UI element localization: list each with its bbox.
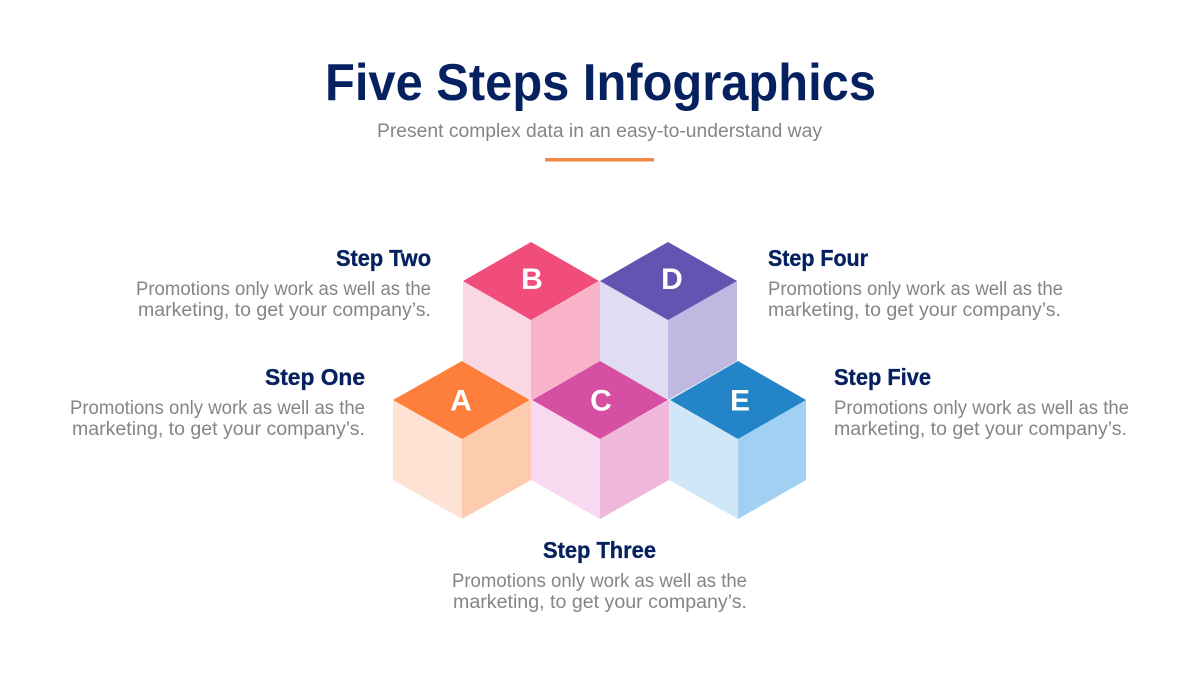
text block: step three: Promotions only work as well as the bbox=[452, 571, 747, 592]
text block: step two: Promotions only work as well as the bbox=[136, 279, 431, 300]
cube A: A bbox=[450, 384, 472, 418]
text block: step four bbox=[768, 245, 1063, 321]
cube D: D bbox=[661, 263, 683, 296]
cube C: C bbox=[590, 384, 612, 418]
text block: step four: marketing, to get your company’s. bbox=[768, 300, 1061, 321]
text block: step one bbox=[70, 364, 365, 440]
text block: step one: marketing, to get your company’s. bbox=[72, 419, 365, 440]
text block: step five bbox=[834, 364, 1129, 440]
text block: step five: marketing, to get your company’s. bbox=[834, 419, 1127, 440]
text block: step one: Promotions only work as well as the bbox=[70, 398, 365, 419]
text block: step three: marketing, to get your company’s. bbox=[453, 592, 747, 613]
text block: step two: Step Two bbox=[336, 245, 431, 271]
text block: step one: Step One bbox=[265, 364, 365, 390]
cube A bbox=[393, 361, 531, 519]
orange accent rule bbox=[545, 158, 654, 162]
text block: step four: Step Four bbox=[768, 245, 868, 271]
text block: step five: Step Five bbox=[834, 364, 931, 390]
text block: step three bbox=[452, 537, 747, 613]
cube B bbox=[463, 242, 600, 400]
cube C bbox=[531, 361, 669, 519]
title: Five Steps Infographics bbox=[325, 54, 876, 112]
cube D bbox=[600, 242, 737, 400]
text block: step two bbox=[136, 245, 431, 321]
cube B: B bbox=[521, 263, 543, 296]
text block: step four: Promotions only work as well as the bbox=[768, 279, 1063, 300]
text block: step five: Promotions only work as well as the bbox=[834, 398, 1129, 419]
subtitle: Present complex data in an easy-to-understand way bbox=[377, 121, 822, 142]
text block: step three: Step Three bbox=[543, 537, 656, 563]
cube E: E bbox=[730, 384, 750, 418]
text block: step two: marketing, to get your company’s. bbox=[138, 300, 431, 321]
cube E bbox=[669, 361, 806, 519]
